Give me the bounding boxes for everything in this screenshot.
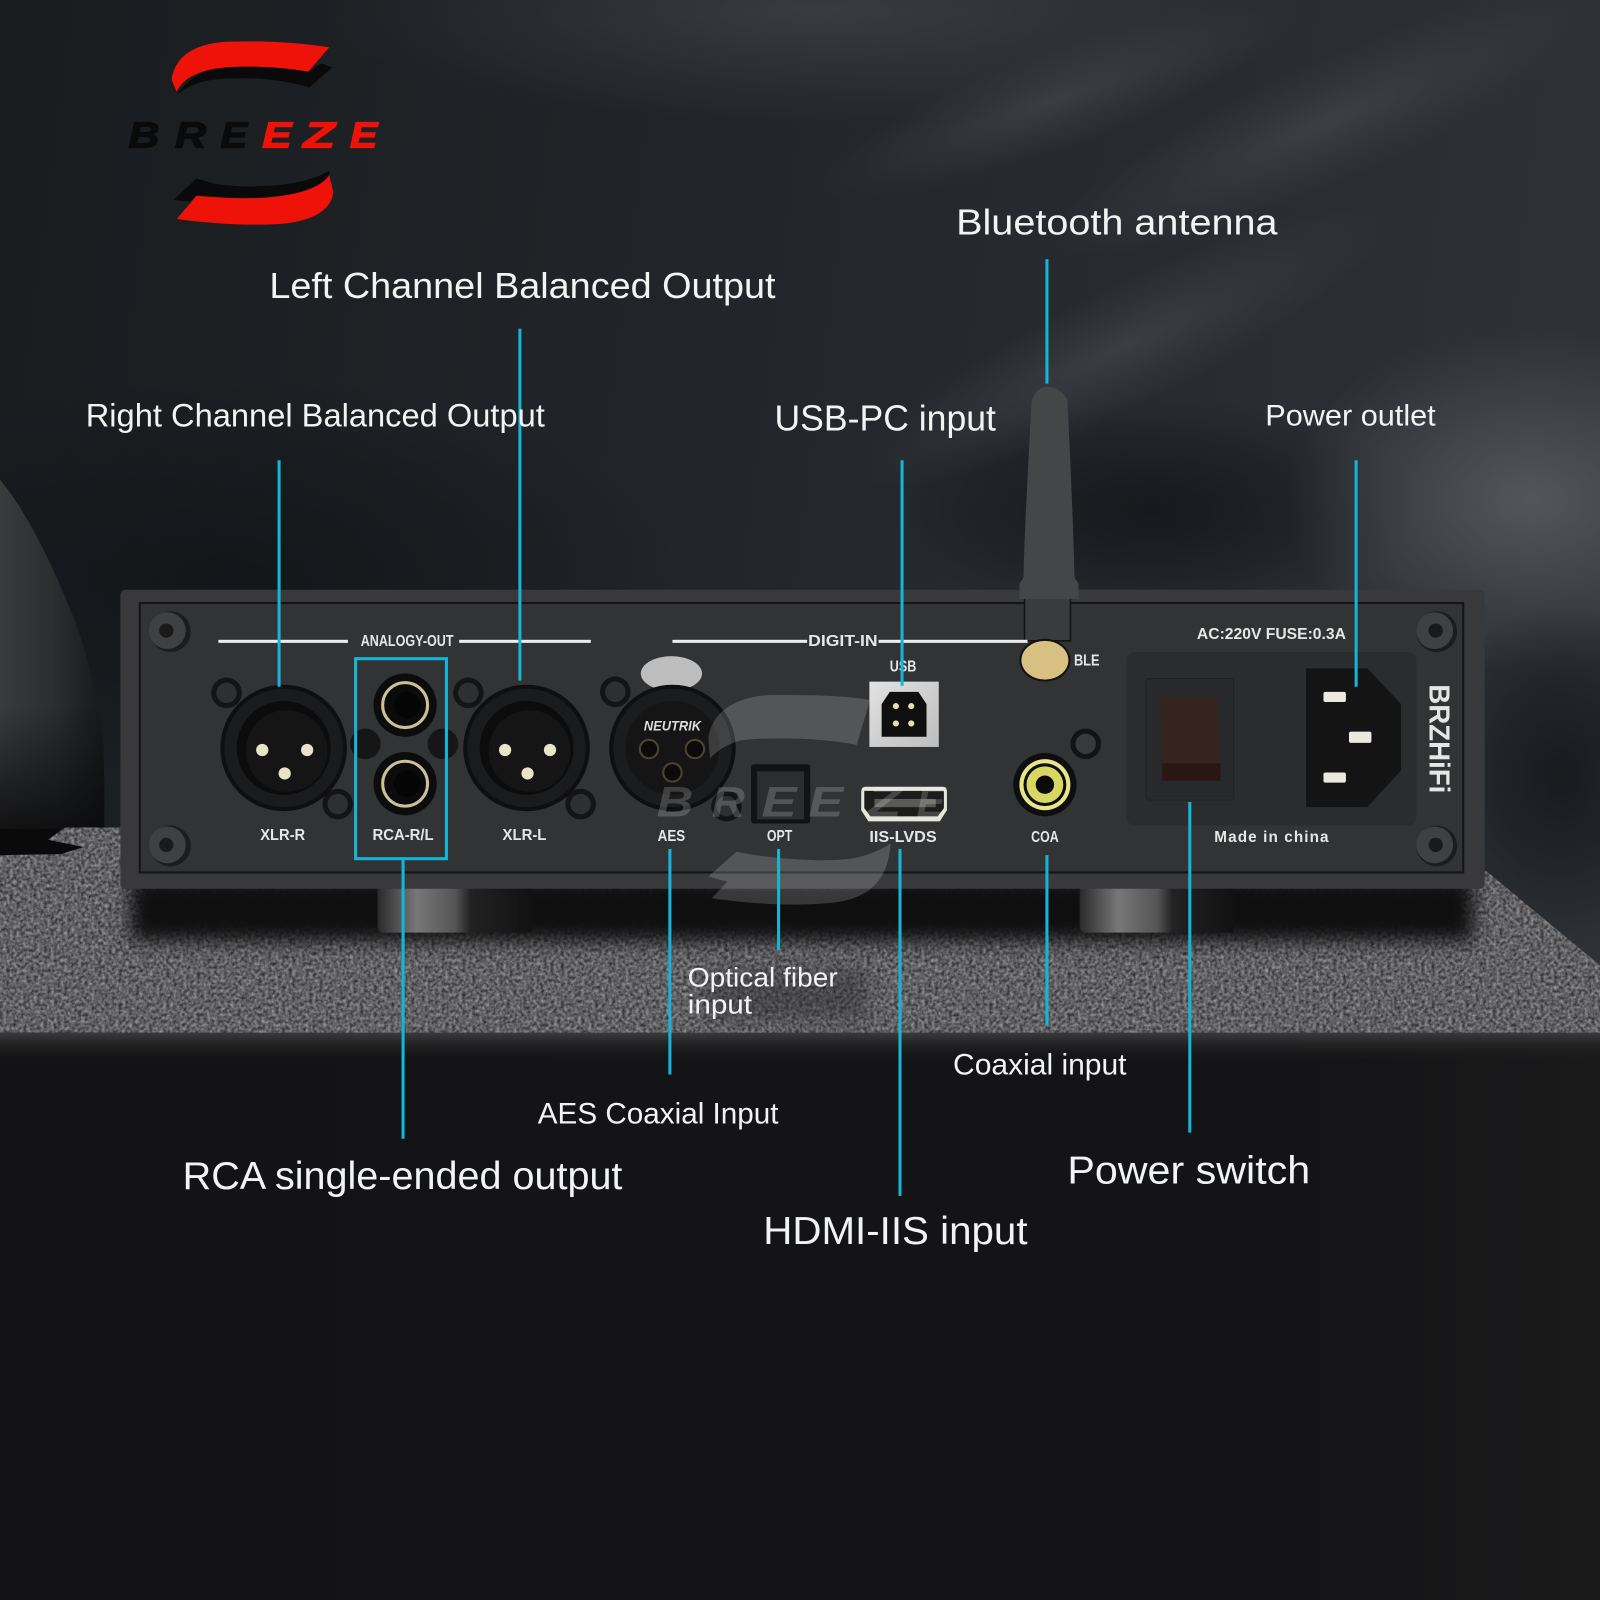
power switch rocker	[1146, 679, 1234, 800]
corner screws	[149, 611, 1457, 866]
label: Power outlet: Power outlet	[1265, 400, 1436, 433]
leader lines	[279, 259, 1356, 1196]
logo: BREEZE: E	[350, 114, 378, 155]
label: HDMI-IIS input: HDMI-IIS input	[763, 1210, 1028, 1253]
connector: AES: NEUTRIK	[644, 719, 703, 735]
watermark: faded logo: R	[712, 779, 745, 827]
connector: XLR left: XLR-L	[503, 827, 546, 844]
watermark: faded logo: Z	[865, 779, 904, 827]
label: AES Coaxial Input: AES Coaxial Input	[538, 1097, 779, 1130]
connector: HDMI: IIS-LVDS	[869, 829, 937, 846]
smudge behind optical label	[704, 969, 867, 1020]
power outlet	[1306, 668, 1401, 807]
panel text: ratings and branding: AC:220V FUSE:0.3A	[1197, 626, 1346, 643]
device feet	[378, 886, 1235, 933]
section lines and headings	[218, 633, 1028, 650]
device rear panel	[120, 387, 1485, 889]
table front face	[0, 1033, 1600, 1600]
chassis	[120, 590, 1485, 889]
label: Right Channel Balanced Output: Right Channel Balanced Output	[86, 397, 545, 434]
label: Left Channel Balanced Output: Left Channel Balanced Output	[269, 266, 776, 306]
watermark: faded logo: B	[657, 779, 693, 827]
table top surface	[0, 828, 1600, 1039]
connector: optical	[751, 764, 810, 845]
watermark: faded logo	[657, 695, 947, 905]
section lines and headings: DIGIT-IN	[808, 633, 878, 650]
connector: HDMI	[861, 787, 947, 846]
connector: AES	[600, 656, 742, 845]
connector: USB-B: USB	[890, 658, 916, 675]
connector: USB-B	[869, 658, 939, 747]
panel text: ratings and branding: BRZHiFi	[1423, 684, 1455, 793]
connector: coaxial: COA	[1031, 829, 1059, 846]
device shadow on table	[131, 878, 1473, 941]
panel text: ratings and branding	[1197, 626, 1455, 846]
logo: BREEZE: Z	[302, 114, 338, 155]
connector: XLR right	[211, 678, 353, 844]
label: USB-PC input: USB-PC input	[774, 399, 996, 439]
connector: RCA pair: RCA-R/L	[372, 827, 434, 844]
logo: BREEZE: R	[175, 114, 206, 155]
section lines and headings: ANALOGY-OUT	[361, 633, 454, 650]
label: Optical fiber input	[688, 963, 838, 1019]
label: Coaxial input: Coaxial input	[953, 1048, 1127, 1081]
label: Bluetooth antenna: Bluetooth antenna	[956, 203, 1278, 243]
logo: BREEZE: B	[128, 114, 159, 155]
connector: XLR right: XLR-R	[260, 827, 305, 844]
connector: optical: OPT	[767, 828, 793, 845]
label: Power switch: Power switch	[1067, 1150, 1310, 1193]
connector: AES: AES	[658, 828, 685, 845]
logo: BREEZE	[128, 41, 378, 225]
watermark: faded logo: E	[762, 779, 799, 827]
panel text: ratings and branding: Made in china	[1214, 829, 1329, 846]
connector: BLE gold nut	[1019, 639, 1099, 682]
bluetooth antenna	[1019, 387, 1079, 641]
RCA highlight box	[356, 659, 446, 859]
watermark: faded logo: E	[808, 779, 845, 827]
watermark: faded logo: E	[917, 779, 947, 827]
connector: XLR left	[453, 678, 596, 844]
vase silhouette	[0, 480, 105, 855]
connector: BLE gold nut: BLE	[1074, 652, 1099, 669]
label: Optical fiber input: Optical fiber	[688, 963, 838, 993]
connector: coaxial	[1013, 729, 1101, 846]
label: RCA single-ended output: RCA single-ended output	[183, 1155, 623, 1198]
logo: BREEZE: E	[262, 114, 293, 155]
connector: RCA pair	[350, 673, 458, 844]
label: Optical fiber input: input	[688, 989, 753, 1019]
power module: switch and outlet	[1127, 652, 1416, 826]
logo: BREEZE: E	[221, 114, 248, 155]
vase contact shadow	[0, 829, 84, 855]
